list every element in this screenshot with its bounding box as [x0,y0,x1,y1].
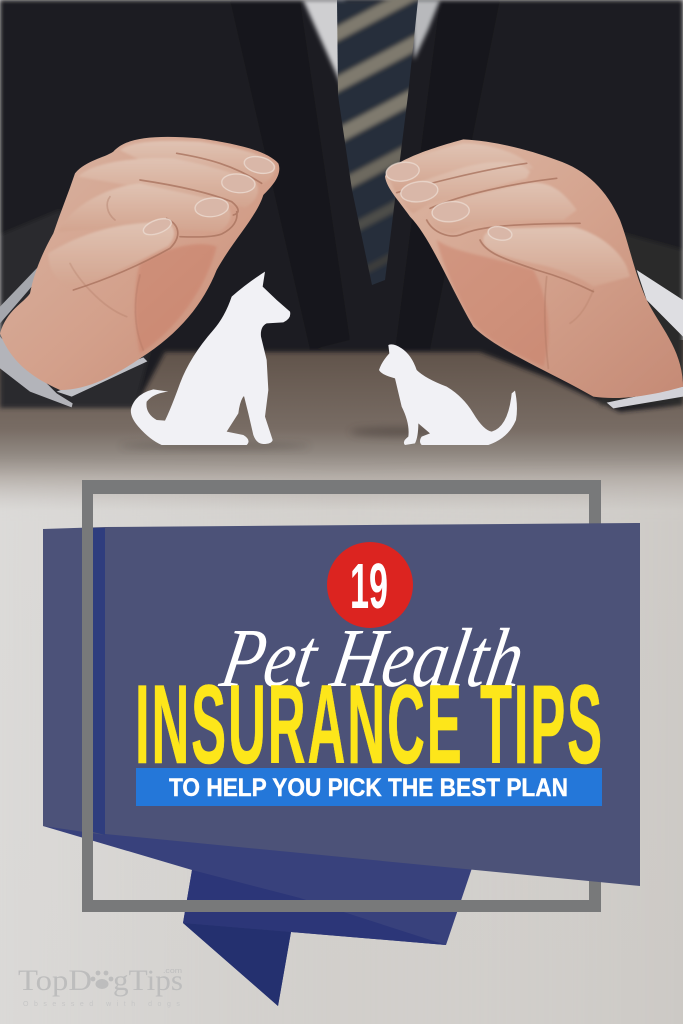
shirt [303,0,440,100]
icon: paper cat silhouette [379,344,517,445]
left hand fingers [48,141,276,350]
subtitle bar [136,768,602,806]
left shirt cuff [0,267,147,407]
logo: TopDogTips watermark [18,964,183,1008]
table shadows under pets [120,427,450,448]
heading: Pet Health: Pet Health [214,613,531,705]
ribbon: lower fold and tail [43,800,472,1006]
ribbon: left flap [43,527,105,835]
ribbon: dark strip beside frame [93,528,105,835]
left hand [0,137,279,390]
palm shading [135,244,217,353]
striped tie [337,0,418,285]
ribbon: main panel [105,523,640,886]
icon: paw [91,971,113,989]
logo: TopDogTips watermark: gTips [113,964,183,997]
fingernails [141,154,276,238]
fingernails [385,160,513,242]
badge: number 19: 19 [350,550,388,622]
badge: number 19 [327,542,413,628]
right hand [385,139,683,398]
right shirt cuff [607,270,683,408]
logo: TopDogTips watermark: Obsessed with dogs [23,1001,183,1008]
finger creases [70,153,262,350]
right hand fingers [385,143,630,368]
subtitle bar: TO HELP YOU PICK THE BEST PLAN [169,774,568,802]
palm shading [437,240,548,367]
logo: TopDogTips watermark: .com [163,968,182,975]
finger creases [397,163,593,368]
grey frame [82,480,601,912]
logo: TopDogTips watermark: TopD [18,964,92,997]
icon: paper dog silhouette [131,272,290,445]
background photo: table and wall [0,340,683,1024]
businessman suit [0,0,683,412]
